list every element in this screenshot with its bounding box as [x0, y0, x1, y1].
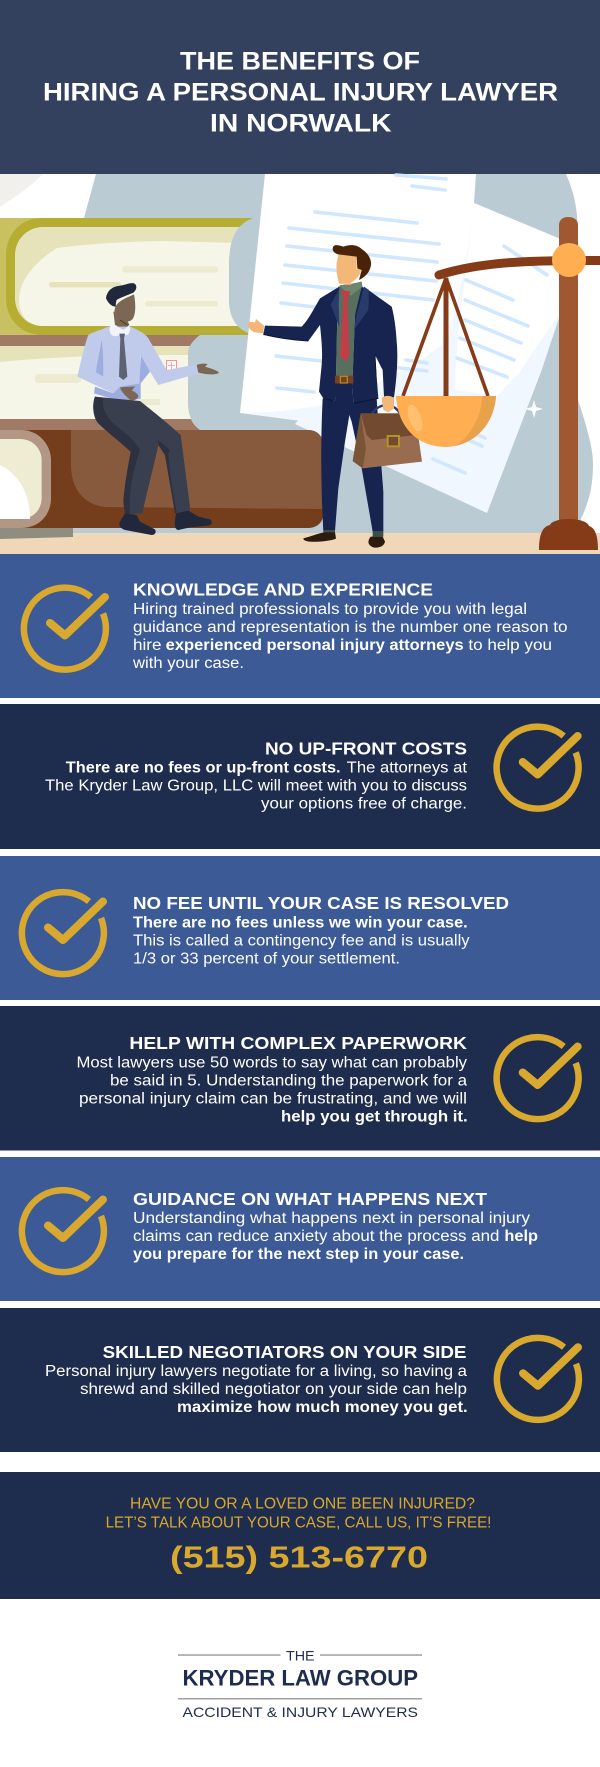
icon: gold check in circle [497, 1338, 579, 1420]
panel: guidance on what happens next [0, 1157, 600, 1301]
body text: Understanding what happens next in personal injury [133, 1210, 530, 1227]
body text [76, 1054, 468, 1125]
body text: your options free of charge. [261, 796, 467, 813]
panel: no fee until your case is resolved [0, 856, 600, 1000]
middle book [0, 335, 200, 430]
title: HIRING A PERSONAL INJURY LAWYER [43, 79, 558, 107]
logo: The Kryder Law Group: ACCIDENT & INJURY LAWYERS [182, 1704, 418, 1720]
heading: NO FEE UNTIL YOUR CASE IS RESOLVED [133, 893, 509, 913]
icon: gold check in circle [22, 892, 104, 974]
body text: The attorneys at [347, 760, 468, 777]
body text [45, 760, 468, 813]
body text: with your case. [132, 655, 244, 672]
paper text lines [276, 175, 547, 473]
body text: you prepare for the next step in your case. [133, 1246, 464, 1263]
standing lawyer [247, 245, 397, 548]
icon: gold check in circle [497, 727, 579, 809]
body text [133, 914, 470, 967]
heading: SKILLED NEGOTIATORS ON YOUR SIDE [103, 1342, 467, 1362]
body text [133, 1210, 538, 1263]
panel: skilled negotiators on your side [0, 1308, 600, 1452]
title [43, 47, 558, 138]
heading: GUIDANCE ON WHAT HAPPENS NEXT [133, 1189, 487, 1209]
body text: hire [133, 637, 162, 654]
call to action text: LET’S TALK ABOUT YOUR CASE, CALL US, IT’S FREE! [106, 1514, 491, 1531]
panel: knowledge and experience [0, 554, 600, 698]
heading: KNOWLEDGE AND EXPERIENCE [133, 580, 433, 600]
icon: gold check in circle [22, 1190, 104, 1272]
heading: NO UP-FRONT COSTS [265, 739, 467, 759]
paper back right [295, 203, 570, 513]
body text: experienced personal injury attorneys [166, 637, 464, 654]
title: THE BENEFITS OF [180, 47, 420, 75]
body text: 1/3 or 33 percent of your settlement. [133, 950, 400, 967]
body text: shrewd and skilled negotiator on your side can help [80, 1381, 467, 1398]
body text: Personal injury lawyers negotiate for a living, so having a [45, 1363, 467, 1380]
panel: help with complex paperwork [0, 1006, 600, 1150]
call to action text [106, 1495, 491, 1531]
body text: claims can reduce anxiety about the process and [133, 1228, 499, 1245]
logo: The Kryder Law Group: KRYDER LAW GROUP [182, 1665, 418, 1690]
body text: Most lawyers use 50 words to say what can probably [76, 1054, 467, 1071]
body text: There are no fees unless we win your case. [133, 914, 468, 931]
illustration: lawyer and client with books and scales [0, 174, 600, 554]
scales of justice [396, 217, 600, 550]
body text: guidance and representation is the number one reason to [133, 619, 568, 636]
bottom book [0, 430, 323, 539]
body text: The Kryder Law Group, LLC will meet with you to discuss [45, 778, 467, 795]
header panel [0, 0, 600, 174]
phone number: (515) 513-6770 [170, 1539, 428, 1574]
body text: Hiring trained professionals to provide you with legal [133, 601, 527, 618]
top book [0, 218, 264, 335]
icon: gold check in circle [24, 588, 106, 670]
background shape [60, 174, 593, 533]
heading: HELP WITH COMPLEX PAPERWORK [129, 1033, 467, 1053]
small plus box [166, 360, 176, 370]
paper front left [240, 174, 476, 420]
body text: maximize how much money you get. [177, 1399, 468, 1416]
seated client [77, 283, 219, 535]
body text: help you get through it. [281, 1108, 468, 1125]
floor [0, 533, 600, 554]
title: IN NORWALK [210, 110, 392, 138]
body text: be said in 5. Understanding the paperwork for a [110, 1072, 467, 1089]
body text [45, 1363, 468, 1416]
body text: to help you [468, 637, 552, 654]
panel: no up-front costs [0, 704, 600, 849]
briefcase [353, 396, 422, 468]
logo: The Kryder Law Group [178, 1647, 422, 1720]
body text [132, 601, 568, 672]
body text: This is called a contingency fee and is usually [133, 932, 470, 949]
call to action panel [0, 1472, 600, 1599]
logo: The Kryder Law Group: THE [286, 1647, 315, 1663]
body text: personal injury claim can be frustrating, and we will [79, 1090, 467, 1107]
body text: help [504, 1228, 538, 1245]
call to action text: HAVE YOU OR A LOVED ONE BEEN INJURED? [130, 1495, 475, 1512]
body text: There are no fees or up-front costs. [66, 760, 341, 777]
icon: gold check in circle [497, 1037, 579, 1119]
